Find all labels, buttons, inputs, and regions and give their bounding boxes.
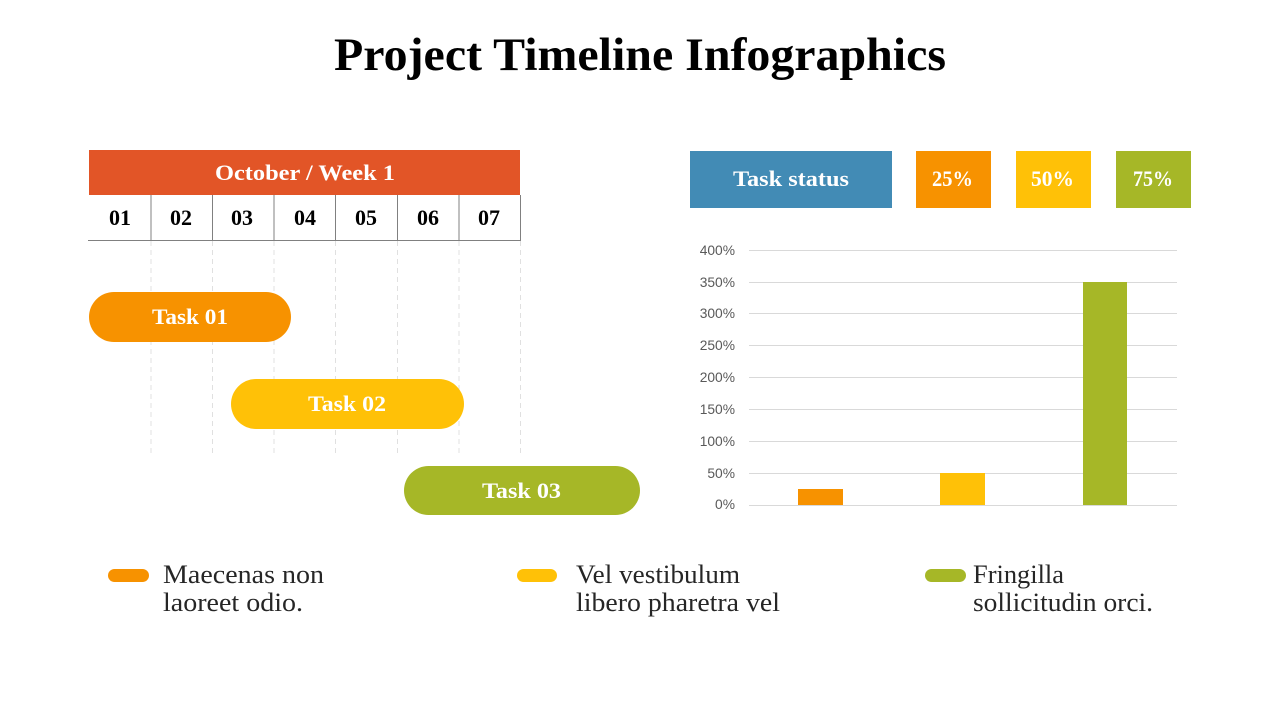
calendar header: October / Week 1	[89, 150, 520, 195]
legend item: Fringilla sollicitudin orci.: Fringilla	[973, 560, 1064, 589]
legend item: Vel vestibulum libero pharetra vel: Vel vestibulum	[576, 560, 740, 589]
calendar day cells: 07	[478, 205, 500, 230]
calendar day cells: 06	[417, 205, 439, 230]
bar: 50%	[940, 473, 985, 505]
status chip: 50%: 50%	[1031, 166, 1074, 191]
legend item: Maecenas non laoreet odio.: Maecenas non	[163, 560, 324, 589]
y axis labels: 250%	[700, 338, 735, 353]
status chip: 75%	[1116, 151, 1191, 208]
task bar: Task 01: Task 01	[152, 304, 228, 329]
calendar day cells	[88, 195, 521, 240]
y axis labels	[700, 243, 735, 512]
status chip: 75%: 75%	[1133, 166, 1173, 191]
y axis labels: 400%	[700, 243, 735, 258]
calendar header: October / Week 1: October / Week 1	[215, 160, 395, 185]
y axis labels: 0%	[715, 497, 735, 512]
panel: task status legend	[690, 151, 1191, 208]
legend item: Maecenas non laoreet odio.: laoreet odio.	[163, 588, 303, 617]
y axis labels: 50%	[707, 466, 735, 481]
bar: 25%	[798, 489, 843, 505]
calendar day cells: 04	[294, 205, 316, 230]
calendar day cells: 01	[109, 205, 131, 230]
status chip: 25%	[916, 151, 991, 208]
status chip: 50%	[1016, 151, 1091, 208]
panel: gantt timeline	[88, 150, 640, 515]
calendar day cells: 05	[355, 205, 377, 230]
calendar day cells: 02	[170, 205, 192, 230]
status label	[690, 151, 892, 208]
calendar day cells: 03	[231, 205, 253, 230]
legend item: Vel vestibulum libero pharetra vel: libero pharetra vel	[576, 588, 780, 617]
legend item: Fringilla sollicitudin orci.	[925, 560, 1153, 617]
legend item: Vel vestibulum libero pharetra vel	[517, 560, 780, 617]
y axis labels: 350%	[700, 275, 735, 290]
bar: 350%	[1083, 282, 1127, 505]
y axis labels: 150%	[700, 402, 735, 417]
y axis labels: 300%	[700, 306, 735, 321]
task bar: Task 02: Task 02	[308, 391, 386, 416]
task bar: Task 03	[404, 466, 640, 515]
task bar: Task 01	[89, 292, 291, 342]
status label: Task status	[733, 166, 849, 191]
task bar: Task 03: Task 03	[482, 478, 561, 503]
legend item: Fringilla sollicitudin orci.: sollicitudin orci.	[973, 588, 1153, 617]
task bar: Task 02	[231, 379, 464, 429]
y axis labels: 200%	[700, 370, 735, 385]
y axis labels: 100%	[700, 434, 735, 449]
status chip: 25%: 25%	[932, 166, 973, 191]
legend item: Maecenas non laoreet odio.	[108, 560, 324, 617]
title: Project Timeline Infographics	[334, 29, 946, 81]
bar chart: task status percentages	[700, 243, 1177, 512]
